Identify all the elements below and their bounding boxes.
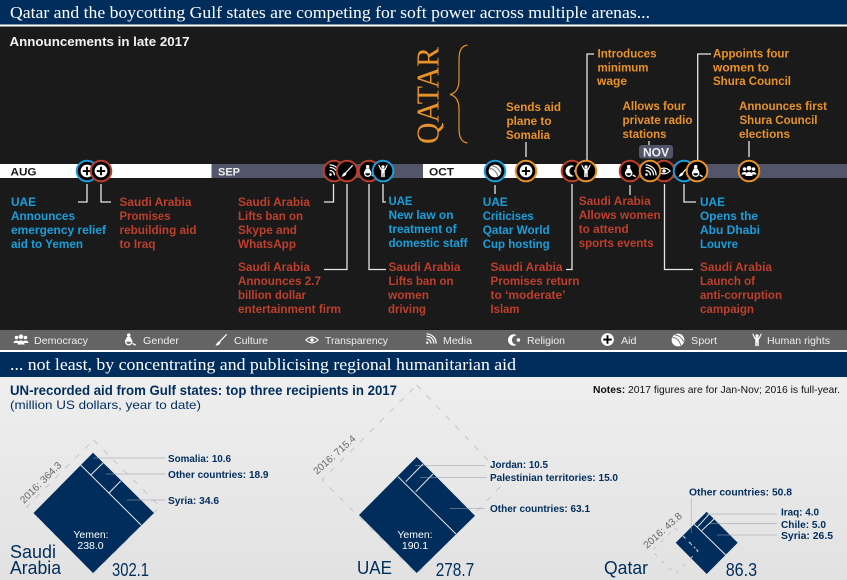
text: Qatar Shura appointments: women to <box>712 60 769 74</box>
text: UAE World Cup criticism: Cup hosting <box>483 237 550 251</box>
month label: NOV: NOV <box>643 148 669 160</box>
text: Qatar elections: Shura Council <box>740 113 818 127</box>
text: Qatar elections: Announces first <box>739 99 827 113</box>
legend: media <box>426 334 472 347</box>
text: Saudi anti-corruption: anti-corruption <box>700 288 782 302</box>
icon: Qatar aid <box>516 161 536 181</box>
divider <box>0 350 847 352</box>
label: 2016 total: 2016: 364.3 <box>18 460 65 506</box>
text: Saudi women at sports: to attend <box>579 222 629 236</box>
text: Qatar Shura appointments: Shura Council <box>713 74 791 88</box>
label: Jordan: Jordan: 10.5 <box>490 460 548 471</box>
text: UAE emergency relief: Announces <box>11 209 75 223</box>
second banner title: ... not least, by concentrating and publicising regional humanitarian aid <box>10 355 517 374</box>
label: Syria: Syria: 26.5 <box>781 531 833 542</box>
icon: UAE sport <box>485 161 505 181</box>
text: UAE World Cup criticism: UAE <box>483 195 508 209</box>
icon: Saudi media <box>324 161 344 181</box>
timeline bar <box>0 163 847 178</box>
text: UAE Louvre: Abu Dhabi <box>700 223 760 237</box>
icon: Saudi culture <box>337 161 357 181</box>
country name: Arabia <box>10 558 62 578</box>
banner title: Qatar and the boycotting Gulf states are competing for soft power across multiple arenas... <box>10 3 650 22</box>
text: Qatar radio stations: stations <box>622 127 667 141</box>
legend: aid <box>601 333 637 347</box>
text: UAE domestic staff law: New law on <box>388 208 454 222</box>
text: Saudi rebuilding aid: to Iraq <box>120 237 156 251</box>
text: UAE World Cup criticism <box>483 195 550 251</box>
brace for Qatar <box>450 45 468 143</box>
text: Saudi rebuilding aid: Saudi Arabia <box>120 195 192 209</box>
label: Somalia: Somalia: 10.6 <box>168 454 231 465</box>
text: Saudi women at sports <box>579 194 661 250</box>
legend: sport <box>672 334 717 347</box>
legend: sport: Sport <box>691 335 717 347</box>
label: Yemen: Yemen: <box>397 529 433 541</box>
text: UAE World Cup criticism: Criticises <box>483 209 534 223</box>
country name <box>10 542 62 578</box>
text: Saudi women driving: women <box>387 288 429 302</box>
icon: Saudi transparency <box>654 161 674 181</box>
text: UAE domestic staff law: treatment of <box>388 222 457 236</box>
text: Saudi Skype ban: WhatsApp <box>238 237 296 251</box>
label: Iraq: Iraq: 4.0 <box>781 508 819 519</box>
second banner <box>0 352 847 377</box>
top banner <box>0 0 847 26</box>
icon: UAE human rights <box>373 161 393 181</box>
text: Qatar minimum wage: wage <box>596 74 627 88</box>
text: Qatar elections <box>739 99 827 141</box>
notes: Notes: 2017 figures are for Jan-Nov; 2016 is full-year. <box>593 384 840 396</box>
text: Saudi Skype ban: Lifts ban on <box>238 209 303 223</box>
section heading: announcements: Announcements in late 2017 <box>10 34 190 49</box>
text: Qatar radio stations: private radio <box>622 113 692 127</box>
label: Other countries: Other countries: 18.9 <box>168 470 269 481</box>
legend: transparency: Transparency <box>325 335 389 347</box>
panel: timeline background <box>0 26 847 330</box>
chart subheading: (million US dollars, year to date) <box>10 398 201 412</box>
month label: AUG: AUG <box>10 166 36 178</box>
text: UAE emergency relief: emergency relief <box>11 223 107 237</box>
text: Saudi anti-corruption: Saudi Arabia <box>700 260 772 274</box>
text: Qatar Shura appointments <box>712 46 791 88</box>
label: Palestinian territories: Palestinian territories: 15.0 <box>490 473 618 484</box>
total: 86.3 <box>726 560 757 580</box>
icon: UAE culture <box>674 161 694 181</box>
text: Saudi moderate Islam: Saudi Arabia <box>490 260 563 274</box>
legend: religion: Religion <box>527 335 565 347</box>
legend: gender: Gender <box>143 335 180 347</box>
value: Yemen: 190.1 <box>402 540 428 552</box>
legend: culture: Culture <box>234 335 268 347</box>
label: Other countries: Other countries: 50.8 <box>689 488 792 499</box>
text: UAE domestic staff law: domestic staff <box>388 236 468 250</box>
text: Saudi entertainment firm: billion dollar <box>238 288 306 302</box>
chart: UAE diamond <box>312 385 618 580</box>
legend: aid: Aid <box>621 335 637 347</box>
text: Saudi moderate Islam <box>490 260 580 316</box>
text: Saudi entertainment firm: Saudi Arabia <box>238 260 310 274</box>
label: Chile: Chile: 5.0 <box>781 520 826 531</box>
text: Saudi women driving <box>387 260 461 316</box>
text: Saudi rebuilding aid <box>120 195 196 251</box>
leader lines <box>78 54 749 270</box>
legend: gender <box>125 333 180 347</box>
text: Qatar aid plane <box>506 100 561 142</box>
text: UAE emergency relief: aid to Yemen <box>11 237 83 251</box>
month label: SEP: SEP <box>218 166 240 178</box>
label: Other countries: Other countries: 63.1 <box>490 504 590 515</box>
chart: Qatar diamond <box>604 488 833 580</box>
text: Saudi women driving: Saudi Arabia <box>388 260 461 274</box>
legend bar <box>0 330 847 350</box>
icon: Qatar human rights <box>576 161 596 181</box>
text: Saudi women at sports: Allows women <box>579 208 661 222</box>
country name: Saudi <box>10 542 56 562</box>
text: Saudi Skype ban <box>238 195 310 251</box>
chart: Saudi Arabia diamond <box>10 440 269 580</box>
text: Saudi moderate Islam: to ‘moderate’ <box>490 288 566 302</box>
text: Qatar aid plane: Somalia <box>506 128 550 142</box>
text: Qatar elections: elections <box>739 127 790 141</box>
text: Qatar radio stations <box>622 99 692 141</box>
text: UAE Louvre: Louvre <box>700 237 738 251</box>
label: Yemen: Yemen: <box>73 529 109 541</box>
total: 302.1 <box>112 560 149 580</box>
text: Qatar minimum wage: minimum <box>598 60 648 74</box>
text: UAE emergency relief: UAE <box>11 195 36 209</box>
total: 278.7 <box>436 560 474 580</box>
text: Qatar radio stations: Allows four <box>622 99 686 113</box>
legend: democracy: Democracy <box>34 335 89 347</box>
label: 2016 total: 2016: 715.4 <box>312 433 359 477</box>
text: Saudi moderate Islam: Islam <box>490 302 520 316</box>
text: Saudi women at sports: sports events <box>579 236 654 250</box>
icon: Qatar democracy <box>739 161 759 181</box>
month label: NOV <box>639 145 673 160</box>
icon: Saudi gender <box>359 161 379 181</box>
text: UAE Louvre: UAE <box>700 195 725 209</box>
text: Qatar minimum wage <box>596 46 657 88</box>
text: Saudi rebuilding aid: rebuilding aid <box>120 223 196 237</box>
text: Saudi rebuilding aid: Promises <box>120 209 171 223</box>
legend: democracy <box>14 334 89 347</box>
text: UAE domestic staff law <box>388 194 468 250</box>
text: Saudi moderate Islam: Promises return <box>490 274 580 288</box>
text: Saudi entertainment firm <box>238 260 341 316</box>
legend: culture <box>215 334 268 347</box>
text: Saudi Skype ban: Skype and <box>238 223 297 237</box>
text: Saudi anti-corruption: campaign <box>700 302 754 316</box>
text: UAE Louvre: Opens the <box>700 209 758 223</box>
label: 2016 total: 2016: 43.8 <box>642 511 685 551</box>
text: Saudi Skype ban: Saudi Arabia <box>238 195 310 209</box>
text: UAE Louvre <box>700 195 760 251</box>
text: Saudi entertainment firm: Announces 2.7 <box>238 274 321 288</box>
legend: media: Media <box>443 335 472 347</box>
text: Qatar aid plane: Sends aid <box>506 100 561 114</box>
country name: Qatar <box>604 558 648 578</box>
text: Saudi women at sports: Saudi Arabia <box>579 194 651 208</box>
text: Saudi women driving: driving <box>388 302 426 316</box>
text: UAE World Cup criticism: Qatar World <box>483 223 550 237</box>
text: UAE emergency relief <box>11 195 107 251</box>
icon: Qatar media <box>640 161 660 181</box>
text: Saudi women driving: Lifts ban on <box>388 274 454 288</box>
text: Saudi anti-corruption: Launch of <box>700 274 756 288</box>
legend: religion <box>508 334 565 347</box>
event icons <box>77 161 759 181</box>
legend: human rights: Human rights <box>767 335 830 347</box>
country name: UAE <box>357 558 392 578</box>
icon: UAE aid <box>77 161 97 181</box>
heading: Qatar vertical label: QATAR <box>410 46 446 144</box>
text: Qatar minimum wage: Introduces <box>598 46 657 60</box>
text: UAE domestic staff law: UAE <box>388 194 412 208</box>
icon: Saudi aid <box>91 161 111 181</box>
chart heading: UN-recorded aid from Gulf states: top three recipients in 2017 <box>10 383 397 398</box>
text: Qatar Shura appointments: Appoints four <box>713 46 789 60</box>
panel: aid chart background <box>0 377 847 580</box>
label: Syria: Syria: 34.6 <box>168 496 219 507</box>
text: Saudi anti-corruption <box>700 260 782 316</box>
month label: OCT: OCT <box>429 166 454 178</box>
icon: Qatar gender <box>687 161 707 181</box>
value: Yemen: 238.0 <box>77 540 104 552</box>
text: Qatar aid plane: plane to <box>506 114 552 128</box>
text: Saudi entertainment firm: entertainment firm <box>238 302 341 316</box>
icon: Saudi gender sports <box>620 161 640 181</box>
icon: Saudi religion <box>562 161 582 181</box>
